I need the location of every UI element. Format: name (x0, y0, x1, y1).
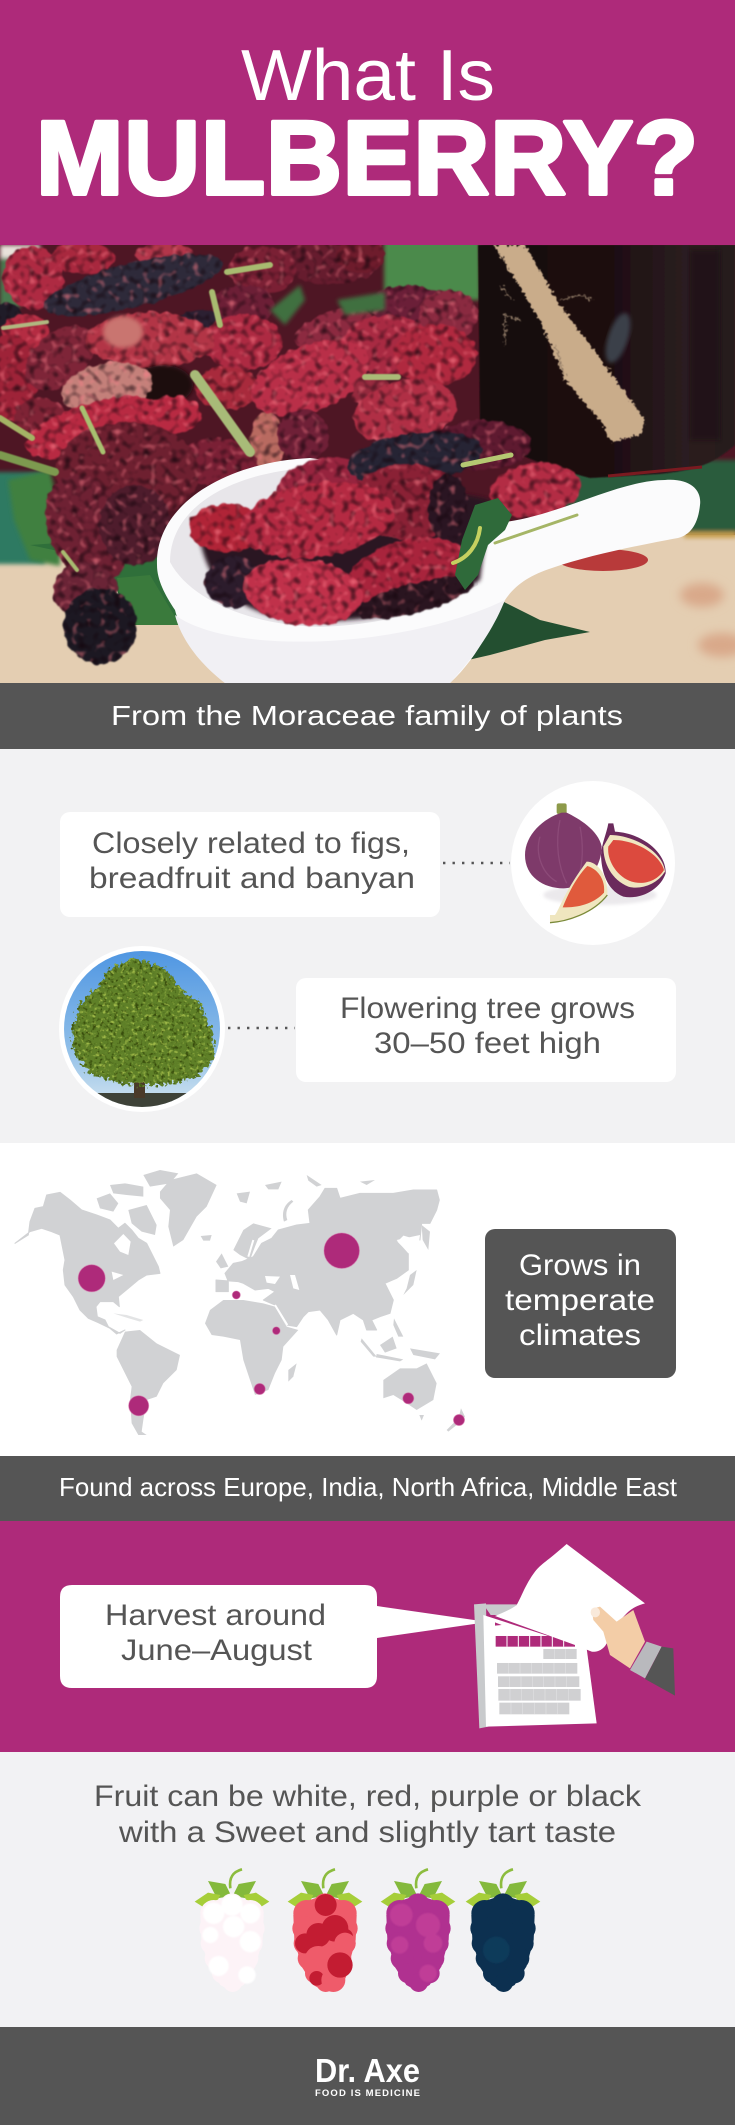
text: fruit description (94, 1780, 642, 1849)
text: fruit description: Fruit can be white, red, purple or black (94, 1780, 642, 1813)
twine (494, 245, 645, 442)
title: What Is: What Is (241, 36, 495, 116)
red berry under handle (558, 549, 648, 571)
berries behind the bowl (0, 235, 478, 454)
icon: red berry (288, 1869, 362, 1992)
dotted connector: tree (228, 1027, 295, 1029)
icon: black berry (466, 1869, 540, 1992)
callout: flowering tree: Flowering tree grows (340, 992, 635, 1025)
callout: temperate climates (485, 1229, 676, 1378)
icon: tree (59, 946, 225, 1113)
callout: closely related: breadfruit and banyan (89, 862, 415, 895)
berries in the bowl (189, 424, 486, 631)
icon: white berry (195, 1869, 269, 1992)
callout: harvest (60, 1585, 488, 1688)
callout: temperate climates: Grows in (519, 1249, 641, 1282)
world map (15, 1170, 465, 1435)
band: Moraceae family (0, 683, 735, 749)
bowl (157, 458, 700, 683)
leaf in bowl (455, 498, 512, 590)
band: found across: Found across Europe, India, North Africa, Middle East (59, 1472, 678, 1502)
panel: fruit colours (0, 1752, 735, 2027)
dotted connector: figs (443, 862, 510, 864)
logo: Dr. Axe: Dr. Axe (315, 2052, 420, 2089)
callout: harvest: Harvest around (105, 1599, 326, 1632)
callout: flowering tree: 30–50 feet high (374, 1027, 601, 1060)
dark gaps under berries (200, 490, 490, 621)
stems (0, 265, 398, 570)
text: fruit description: with a Sweet and slightly tart taste (118, 1816, 616, 1849)
callout: flowering tree (296, 978, 676, 1082)
icon: calendar and hand (474, 1544, 675, 1728)
icon: figs (511, 781, 675, 945)
callout: closely related: Closely related to figs, (92, 827, 410, 860)
callout: closely related (60, 812, 440, 917)
callout: temperate climates: temperate (505, 1284, 655, 1317)
wood table (0, 535, 735, 683)
band: Moraceae family: From the Moraceae family of plants (111, 700, 623, 731)
panel: footer (0, 2027, 735, 2125)
panel: header (0, 0, 735, 245)
panel: world map section (0, 1143, 735, 1456)
band: found across (0, 1456, 735, 1521)
icon: purple berry (381, 1869, 455, 1992)
americas (15, 1170, 217, 1435)
title: MULBERRY?: MULBERRY? (36, 100, 698, 217)
panel: harvest (0, 1521, 735, 1752)
leaves left (8, 470, 62, 566)
jar (478, 245, 735, 478)
dark leaf under bowl (471, 602, 590, 660)
callout: harvest: June–August (121, 1634, 313, 1667)
callout: temperate climates: climates (519, 1319, 641, 1352)
panel: relatives and tree (0, 749, 735, 1143)
map dots (78, 1233, 464, 1426)
photo: mulberries in white bowl (0, 235, 735, 683)
logo: Dr. Axe: FOOD IS MEDICINE (315, 2088, 420, 2099)
eurasia, africa, oceania (205, 1175, 465, 1432)
